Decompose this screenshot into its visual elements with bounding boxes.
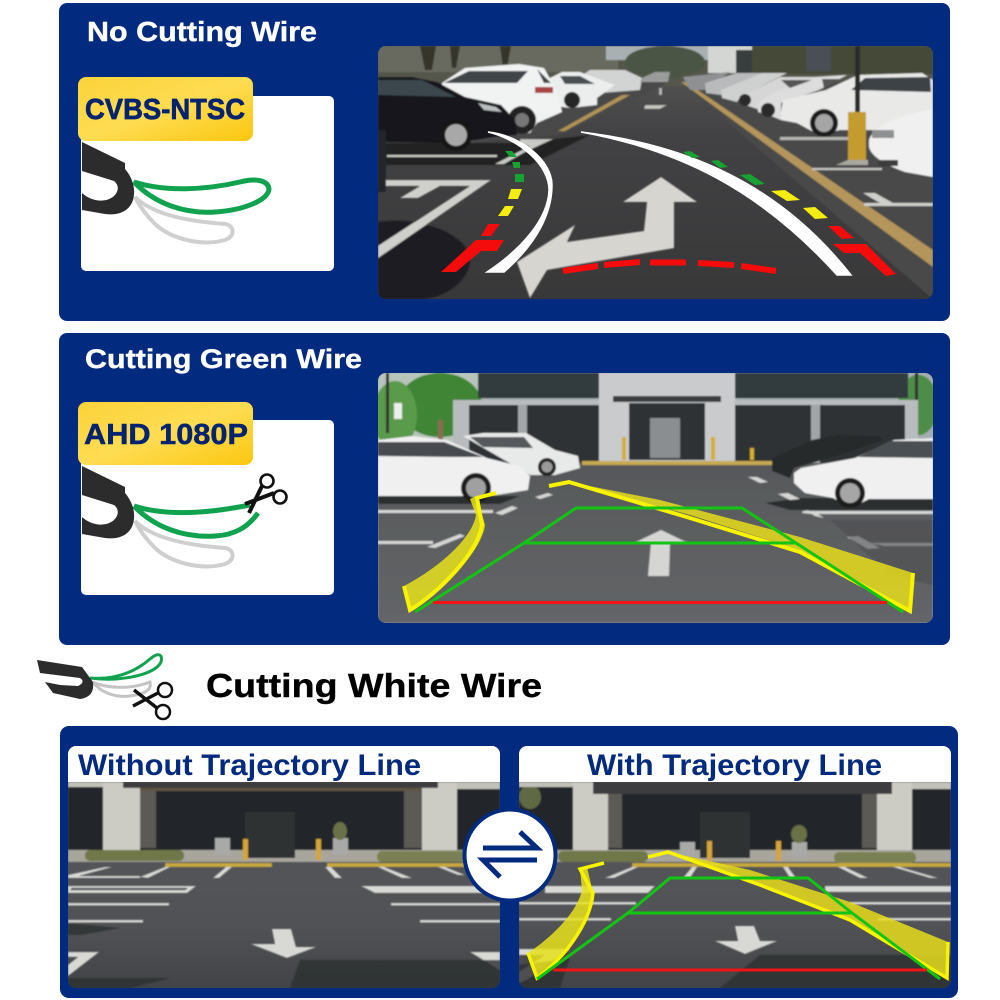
car shadows: [378, 496, 933, 510]
trajectory: right yellow band: [648, 852, 948, 978]
road arrow: [517, 177, 697, 298]
panel: cutting green wire: [59, 333, 950, 645]
badge: CVBS-NTSC: CVBS-NTSC: [85, 94, 245, 126]
bollard: [855, 46, 860, 112]
icon: swap arrows: [464, 810, 556, 900]
badge: CVBS-NTSC: [78, 77, 253, 141]
trajectory: red line: [553, 968, 927, 972]
white SUV: [442, 64, 562, 133]
road arrow: [634, 530, 688, 576]
icon: wire loops with scissors: [37, 655, 172, 719]
trajectory: left yellow band: [404, 493, 496, 610]
parking lines: [378, 477, 933, 576]
road arrow: [251, 929, 316, 958]
trajectory: green box: [415, 508, 903, 612]
photo: storefront with trajectory guide: [373, 373, 938, 623]
heading: with trajectory line: With Trajectory Line: [587, 749, 882, 782]
photo: storefront with trajectory guide: [519, 782, 951, 988]
guide line: right white curve: [581, 132, 851, 275]
card: without trajectory line: [68, 746, 500, 988]
heading: cutting green wire: Cutting Green Wire: [85, 344, 362, 374]
icon: wire loops: [82, 142, 269, 242]
guide line: left white curve: [487, 132, 552, 272]
heading: without trajectory line: Without Trajectory Line: [78, 749, 421, 782]
panel: no cutting wire: [59, 3, 950, 321]
parking lines: [558, 95, 630, 131]
badge: AHD 1080P: AHD 1080P: [84, 419, 248, 451]
trajectory: red line: [433, 601, 887, 604]
large right car: [781, 73, 933, 135]
guide line: left colored dashes: [441, 151, 524, 272]
trajectory: right yellow band: [549, 482, 913, 611]
dark car: [378, 77, 517, 143]
photo: storefront, no guide: [68, 782, 500, 988]
wire card: AHD 1080P: [78, 402, 334, 595]
ground left and right of the lane: [396, 82, 666, 143]
panel: trajectory comparison: [60, 726, 958, 998]
guide line: red bottom arc: [563, 262, 776, 271]
far left cars: [572, 70, 642, 93]
icon: wire loops with scissors: [82, 466, 286, 566]
road arrow: [715, 926, 777, 954]
badge: AHD 1080P: [78, 402, 253, 465]
heading: cutting white wire: Cutting White Wire: [206, 667, 542, 704]
trajectory: left yellow band: [528, 863, 604, 978]
icon: scissors: [245, 474, 286, 513]
front-right car: [868, 128, 933, 178]
card: with trajectory line: [519, 746, 951, 988]
photo: parking lot with dashed guide lines: [378, 46, 933, 299]
wire card: CVBS-NTSC: [78, 77, 334, 271]
guide line: right colored dashes: [683, 151, 896, 276]
heading: no cutting wire: No Cutting Wire: [87, 16, 317, 47]
right cars: [683, 72, 730, 90]
heading row: cutting white wire: [37, 655, 542, 719]
cars: [463, 433, 580, 475]
trajectory: green box: [537, 878, 940, 979]
icon: scissors: [133, 683, 172, 719]
